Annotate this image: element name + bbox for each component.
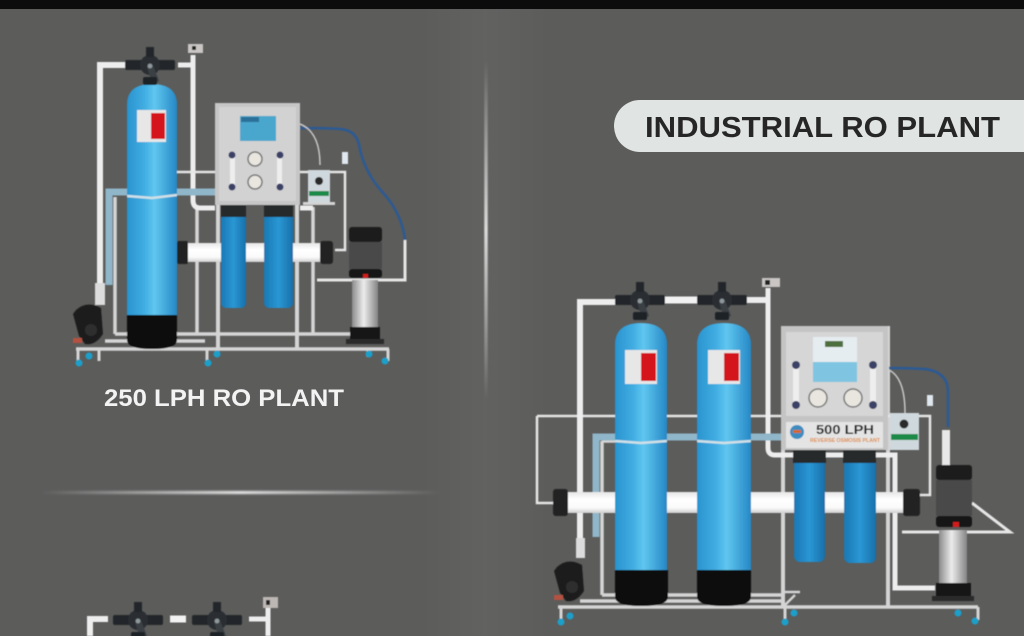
dosing hoses [300, 128, 405, 240]
frame and pipes [76, 55, 405, 361]
light-blue tubing [109, 192, 215, 285]
multiport valves [113, 602, 242, 636]
feet [558, 610, 978, 626]
frame and pipes [537, 288, 1010, 620]
dosing pump [303, 170, 335, 205]
heading pill: INDUSTRIAL RO PLANT [645, 112, 1000, 144]
media tank 1 [615, 323, 668, 606]
light streak: vertical [484, 60, 488, 400]
heading pill [614, 100, 1024, 152]
sensor box [263, 597, 278, 608]
cartridge filters [793, 449, 876, 563]
top black bar [0, 0, 1024, 9]
multiport valve [125, 47, 175, 85]
dosing pump [890, 413, 919, 450]
cartridge filters [221, 204, 293, 308]
membrane housing [568, 492, 904, 513]
control panel [215, 103, 300, 205]
light-blue tubing [596, 437, 790, 537]
plant: third plant cropped at bottom edge [90, 597, 278, 636]
membrane housing [186, 243, 322, 262]
feed pump [554, 561, 584, 601]
light streak: horizontal [40, 491, 440, 494]
plant: 250 LPH RO plant [73, 44, 405, 366]
feed pump [73, 304, 103, 344]
control panel: REVERSE OSMOSIS PLANT [810, 438, 880, 444]
control panel [781, 326, 888, 450]
multiport valves [615, 282, 747, 320]
softener stand: black head [932, 465, 974, 601]
sensor box [762, 278, 780, 287]
media tank 2 [697, 323, 751, 606]
control panel: 500 LPH [816, 422, 874, 437]
caption: 250 LPH RO plant: 250 LPH RO PLANT [104, 385, 344, 412]
sensor box [188, 44, 203, 53]
dosing hoses [889, 368, 948, 427]
softener stand: black head [346, 227, 384, 344]
plant: 500 LPH RO plant [537, 278, 1010, 626]
feet [76, 350, 388, 366]
media tank [127, 84, 177, 349]
